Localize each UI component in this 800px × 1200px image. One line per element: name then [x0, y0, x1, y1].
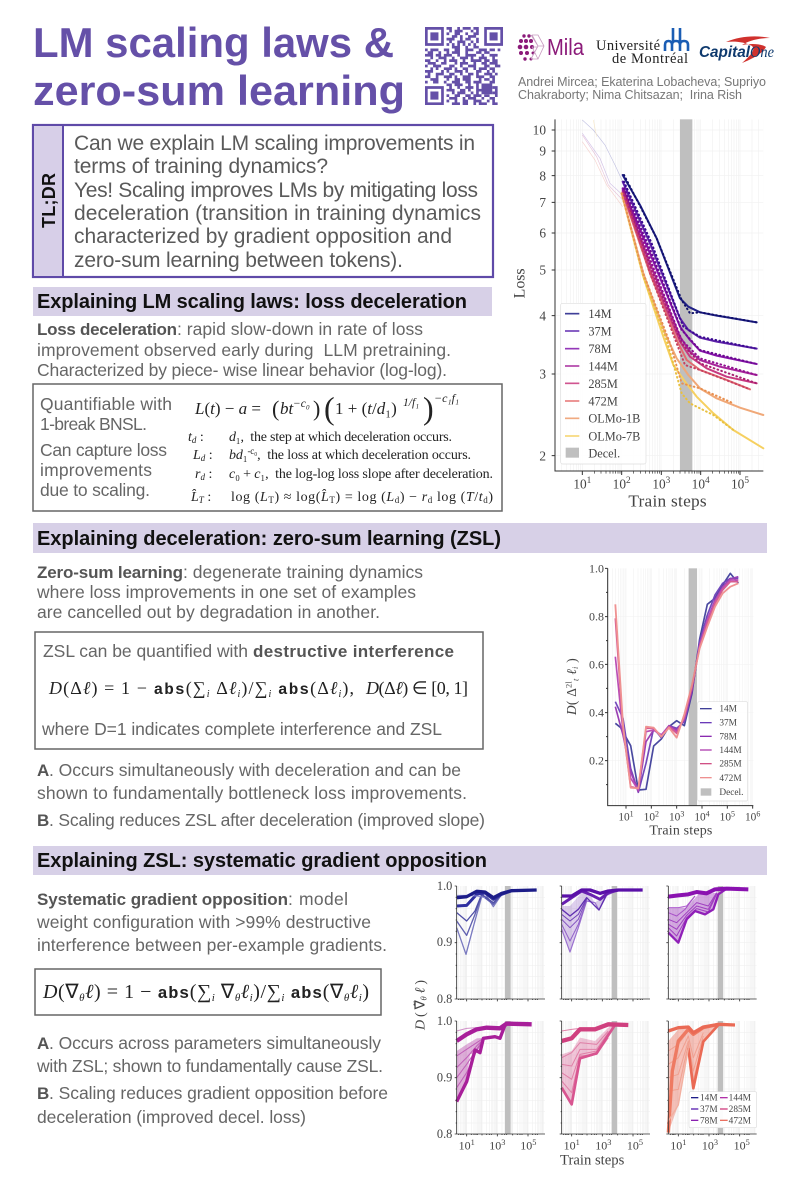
QR code: [425, 28, 502, 104]
axis titles: t: [572, 678, 581, 681]
BNSL definitions: :: [205, 467, 212, 482]
BNSL definitions: d: [192, 435, 197, 445]
BNSL definitions: r: [195, 467, 200, 482]
axes: [605, 568, 753, 809]
legend: Decel.: [588, 447, 620, 461]
ZSL formula: i: [269, 689, 272, 700]
ZSL formula: ),: [342, 678, 354, 699]
formula box: gradient destructive interference: i: [250, 992, 253, 1004]
formula box: gradient destructive interference: θ: [235, 992, 241, 1004]
title: zero-sum learning: [33, 67, 405, 114]
legend: 285M: [588, 377, 618, 391]
BNSL definitions: T: [199, 495, 205, 505]
y axis labels: 6: [539, 226, 546, 241]
BNSL definitions: L: [385, 490, 394, 505]
BNSL side text: Can capture loss: [40, 440, 167, 460]
formula box: gradient destructive interference: )/∑: [253, 981, 281, 1003]
logo: Capital One: Capital: [699, 44, 751, 61]
ZSL formula: ℓ: [229, 678, 237, 698]
x tick labels: 1: [471, 1138, 475, 1147]
BNSL formula: −c₀: [293, 398, 310, 410]
BNSL definitions: , the loss at which deceleration occurs.: [257, 448, 471, 463]
axis titles: ): [564, 658, 579, 666]
BNSL definitions: log (L: [231, 490, 268, 505]
ZSL formula: abs(Δℓ: [278, 678, 337, 699]
y tick labels: 1.0: [437, 879, 452, 893]
BNSL formula: ): [313, 396, 320, 421]
legend: 144M: [729, 1094, 752, 1104]
text: gradient opposition definition: [36, 889, 387, 955]
tick labels: 2: [655, 809, 659, 818]
text: ZSL notes: . Scaling reduces ZSL after deceleration (improved slope): [49, 810, 485, 830]
BNSL side text: Quantifiable with: [40, 394, 172, 414]
heading: gradient opposition: Explaining ZSL: systematic gradient opposition: [37, 850, 487, 872]
formula box: gradient destructive interference: abs(∇: [291, 981, 343, 1004]
BNSL definitions: T: [268, 495, 274, 505]
axis titles: Train steps: [649, 823, 712, 838]
BNSL formula: −c₁f₁: [434, 391, 459, 405]
axis titles: Train steps: [628, 492, 707, 511]
y axis labels: 10: [533, 123, 546, 138]
axis titles: ℓ: [564, 669, 579, 675]
chart: per-parameter destructive interference small multiples: [413, 879, 757, 1168]
panel: TL;DR: [33, 125, 493, 277]
BNSL definitions: d₁, the step at which deceleration occurs.: [229, 430, 452, 445]
legend: 78M: [700, 1116, 718, 1126]
axis titles: i: [571, 666, 580, 669]
axis titles: ℓ: [413, 987, 428, 997]
y tick labels: 1.0: [437, 1014, 452, 1028]
TL;DR text: [74, 132, 481, 272]
BNSL definitions: r: [422, 490, 428, 505]
y axis labels: 5: [539, 263, 546, 278]
BNSL definitions: t: [188, 430, 192, 445]
text: gradient opposition notes: [36, 1033, 388, 1127]
legend: 37M: [588, 324, 612, 338]
tick labels: 0.8: [589, 610, 604, 624]
BNSL formula: ): [423, 390, 434, 426]
formula box: gradient destructive interference: ∇: [215, 981, 235, 1003]
tick labels: 10: [720, 812, 731, 824]
BNSL definitions: ) ≈ log(: [274, 490, 321, 505]
authors: [518, 75, 766, 102]
title: LM scaling laws &: [33, 19, 394, 66]
text: loss deceleration definition: [37, 319, 451, 380]
TL;DR text: Can we explain LM scaling improvements in: [74, 132, 475, 155]
authors: Andrei Mircea; Ekaterina Lobacheva; Supriyo: [518, 75, 766, 89]
panel: 37M: [560, 886, 650, 1001]
legend: 78M: [588, 342, 612, 356]
BNSL formula: (: [272, 396, 279, 421]
legend: OLMo-7B: [588, 429, 640, 443]
tick labels: [589, 561, 760, 824]
text: gradient opposition definition: weight configuration with >99% destructive: [36, 912, 371, 932]
text: ZSL notes: A: [37, 761, 49, 780]
y axis labels: 2: [539, 448, 546, 463]
ZSL formula: D(Δℓ) ∈ [0, 1]: [365, 678, 468, 699]
BNSL definitions: ) = log (: [335, 490, 386, 505]
TL;DR text: Yes! Scaling improves LMs by mitigating loss: [74, 179, 478, 202]
x axis labels: 10: [613, 476, 626, 491]
logo: Université de Montréal: [596, 28, 688, 67]
text: ZSL notes: . Occurs simultaneously with deceleration and can be: [49, 760, 461, 780]
x axis labels: 10: [573, 476, 587, 491]
y tick labels: 0.8: [437, 992, 452, 1006]
BNSL definitions: d: [483, 495, 488, 505]
x tick labels: 10: [734, 1139, 746, 1153]
x tick labels: 3: [714, 1138, 718, 1147]
formula box: gradient destructive interference: ) = 1 − abs(∑: [94, 981, 211, 1004]
BNSL side text: 1-break BNSL.: [40, 414, 147, 434]
axis titles: θ: [418, 995, 428, 1000]
text: loss deceleration definition: Characterized by piece- wise linear behavior (log-log).: [37, 360, 447, 380]
tick labels: 3: [680, 809, 684, 818]
x tick labels: 10: [564, 1139, 576, 1153]
tick labels: 5: [731, 809, 735, 818]
BNSL definitions: [188, 430, 493, 505]
logo: Capital One: One: [750, 44, 774, 61]
axes: [552, 119, 763, 475]
panel: 144M: [455, 1021, 545, 1136]
BNSL formula: bt: [280, 399, 294, 418]
legend: 37M: [719, 719, 738, 729]
BNSL formula: 1 + (t/d₁): [335, 399, 397, 418]
text: ZSL notes: [37, 760, 485, 830]
panel: 285M: [560, 1021, 650, 1136]
y axis labels: [533, 123, 546, 463]
ZSL formula: )/∑: [241, 678, 267, 699]
text: gradient opposition definition: model: [299, 889, 348, 909]
x tick labels: 3: [607, 1138, 611, 1147]
panel: BNSL box: [33, 384, 502, 511]
tick labels: 0.6: [589, 657, 604, 671]
BNSL side text: due to scaling.: [40, 480, 150, 500]
formula box: gradient destructive interference: i: [281, 992, 284, 1004]
BNSL definitions: -c₀: [247, 446, 257, 456]
y tick labels: [437, 879, 452, 1141]
formula box: gradient destructive interference: D(∇: [43, 981, 79, 1003]
y axis labels: 4: [539, 308, 546, 323]
BNSL side text: improvements: [40, 460, 152, 480]
x tick labels: 3: [501, 1138, 505, 1147]
text: gradient opposition notes: . Occurs across parameters simultaneously: [49, 1033, 381, 1053]
x axis labels: 5: [744, 476, 749, 486]
axis titles: ): [413, 980, 428, 985]
text: loss deceleration definition: Loss deceleration: [37, 320, 177, 339]
y axis labels: 3: [539, 367, 546, 382]
axis titles: D ( ∇̃: [413, 1000, 428, 1030]
axis titles: Loss: [512, 268, 529, 298]
chart: destructive interference of loss: [564, 561, 760, 838]
ZSL formula: D(Δℓ) = 1 − abs(∑: [49, 678, 206, 699]
chart: loss vs train steps: [512, 119, 779, 511]
panel: destructive interference box: [35, 632, 483, 749]
box note: where D=1 indicates complete interference and ZSL: [41, 719, 442, 739]
BNSL definitions: :: [196, 430, 204, 445]
x axis labels: 10: [731, 476, 744, 491]
x axis labels: 10: [652, 476, 666, 491]
x tick labels: 10: [670, 1139, 682, 1153]
heading: zero-sum learning: Explaining deceleration: zero-sum learning (ZSL): [37, 528, 501, 550]
BNSL definitions: d: [395, 495, 400, 505]
formula box: gradient destructive interference: ): [362, 981, 369, 1003]
legend: 472M: [588, 394, 618, 408]
formula box: gradient destructive interference: θ: [79, 992, 85, 1004]
x tick labels: 10: [489, 1139, 501, 1153]
x tick labels: 1: [576, 1138, 580, 1147]
panel: 14M: [455, 886, 545, 1001]
axis titles: D( Δ: [564, 688, 579, 715]
legend: 285M: [719, 760, 742, 770]
legend: [698, 702, 748, 801]
panel: 78M: [666, 886, 757, 1001]
x axis labels: 10: [692, 476, 705, 491]
x axis labels: [573, 476, 749, 491]
formula box: gradient destructive interference: ℓ: [85, 981, 94, 1003]
dotted fits: [622, 175, 757, 430]
x axis labels: 4: [705, 476, 710, 486]
tick labels: 1.0: [589, 561, 604, 575]
BNSL definitions: T/t: [466, 490, 483, 505]
x tick labels: 10: [595, 1139, 607, 1153]
legend: [689, 1092, 757, 1128]
x tick labels: 1: [682, 1138, 686, 1147]
legend: 144M: [588, 359, 618, 373]
tick labels: 1: [630, 809, 634, 818]
tick labels: 10: [644, 812, 655, 824]
box heading: ZSL can be quantified with: [43, 641, 248, 661]
BNSL formula: 1/f₁: [403, 397, 419, 409]
tick labels: 0.4: [589, 706, 604, 720]
x tick labels: 5: [532, 1138, 536, 1147]
tick labels: 10: [694, 812, 706, 824]
BNSL definitions: ): [488, 490, 493, 505]
legend: 14M: [700, 1094, 718, 1104]
BNSL definitions: bd₁: [229, 448, 248, 463]
logo: Mila: Mila: [547, 34, 584, 60]
legend: [561, 303, 646, 464]
tick labels: 10: [669, 812, 680, 824]
axis titles: [564, 658, 712, 838]
text: ZSL notes: shown to fundamentally bottleneck loss improvements.: [37, 783, 467, 803]
y tick labels: 0.8: [437, 1127, 452, 1141]
ZSL formula: Δ: [211, 678, 228, 698]
BNSL formula: L(t) − a =: [194, 399, 265, 418]
ZSL formula: [48, 678, 468, 700]
logo: Université de Montréal: de Montréal: [612, 51, 688, 67]
text: gradient opposition definition: interference between per-example gradients.: [37, 935, 387, 955]
text: zero-sum learning definition: Zero-sum learning: [37, 563, 183, 582]
text: gradient opposition definition: Systematic gradient opposition: [37, 890, 288, 909]
axis titles: [512, 268, 707, 511]
text: gradient opposition notes: . Scaling reduces gradient opposition before: [49, 1083, 388, 1103]
formula box: gradient destructive interference: ℓ: [241, 981, 250, 1003]
x axis labels: 2: [626, 476, 631, 486]
axis titles: [413, 980, 625, 1168]
logo: Université de Montréal: Université: [596, 38, 660, 54]
fitted loss curves: [622, 175, 763, 448]
legend: 144M: [719, 746, 742, 756]
x tick labels: 5: [639, 1138, 643, 1147]
x axis labels: 1: [587, 476, 592, 486]
text: gradient opposition notes: deceleration (improved decel. loss): [37, 1107, 306, 1127]
tick labels: 4: [706, 809, 710, 818]
panel: 472M: [666, 1021, 757, 1136]
x tick labels: [459, 1138, 750, 1153]
tick labels: 0.2: [589, 754, 604, 768]
early thin curves: [582, 120, 623, 207]
text: zero-sum learning definition: [36, 562, 423, 622]
axis titles: Train steps: [560, 1152, 625, 1168]
TL;DR text: characterized by gradient opposition and: [74, 225, 452, 248]
legend: 285M: [729, 1105, 752, 1115]
BNSL definitions: log (: [433, 490, 466, 505]
formula box: gradient destructive interference: i: [212, 992, 215, 1004]
formula box: gradient destructive interference: θ: [344, 992, 350, 1004]
text: zero-sum learning definition: where loss improvements in one set of examples: [36, 582, 416, 602]
BNSL definitions: d: [428, 495, 433, 505]
legend: 14M: [588, 307, 612, 321]
y axis labels: 7: [539, 195, 546, 210]
BNSL definitions: d: [200, 472, 205, 482]
logo: Mila: [518, 34, 584, 61]
BNSL definitions: L̂: [320, 489, 329, 505]
heading: loss deceleration: Explaining LM scaling laws: loss deceleration: [37, 291, 467, 313]
BNSL definitions: :: [204, 490, 211, 505]
x tick labels: 5: [746, 1138, 750, 1147]
BNSL definitions: T: [329, 495, 335, 505]
y tick labels: 0.9: [437, 935, 452, 949]
text: loss deceleration definition: improvement observed early during LLM pretraining.: [37, 340, 451, 360]
text: zero-sum learning definition: : degenerate training dynamics: [183, 562, 423, 582]
x tick labels: 10: [459, 1139, 471, 1153]
text: gradient opposition definition: :: [288, 889, 293, 909]
authors: Chakraborty; Nima Chitsazan; Irina Rish: [518, 88, 742, 102]
formula box: gradient destructive interference: i: [359, 992, 362, 1004]
legend: 37M: [700, 1105, 718, 1115]
legend: 14M: [719, 705, 738, 715]
BNSL definitions: L̂: [191, 490, 199, 505]
BNSL formula: (: [324, 390, 335, 426]
formula box: gradient destructive interference: ℓ: [350, 981, 359, 1003]
x axis labels: 3: [666, 476, 671, 486]
BNSL definitions: :: [205, 448, 213, 463]
BNSL definitions: ) −: [400, 490, 421, 505]
y tick labels: 0.9: [437, 1071, 452, 1085]
ZSL formula: i: [238, 689, 241, 700]
TL;DR text: terms of training dynamics?: [74, 155, 328, 178]
y axis labels: 9: [539, 144, 546, 159]
BNSL definitions: d: [201, 453, 206, 463]
logo: Capital One: [699, 36, 774, 63]
title: [33, 19, 405, 114]
legend: 472M: [719, 774, 742, 784]
ZSL formula: i: [207, 689, 210, 700]
ZSL curves: [615, 573, 738, 792]
legend: OLMo-1B: [588, 412, 640, 426]
tick labels: 6: [756, 809, 760, 818]
legend: 78M: [719, 732, 738, 742]
BNSL formula: [194, 390, 459, 426]
formula box: gradient destructive interference: [35, 969, 381, 1015]
x tick labels: 10: [627, 1139, 639, 1153]
legend: Decel.: [719, 788, 743, 798]
box heading: destructive interference: [253, 642, 454, 661]
text: gradient opposition notes: A: [37, 1034, 49, 1053]
TL;DR label: TL;DR: [39, 173, 59, 228]
BNSL side text: [40, 394, 172, 500]
ZSL formula: i: [339, 689, 342, 700]
tick labels: 10: [618, 812, 630, 824]
text: loss deceleration definition: : rapid slow-down in rate of loss: [177, 319, 423, 339]
text: zero-sum learning definition: are cancelled out by degradation in another.: [37, 602, 380, 622]
BNSL definitions: c₀ + c₁, the log-log loss slope after deceleration.: [229, 467, 493, 482]
text: gradient opposition notes: with ZSL; shown to fundamentally cause ZSL.: [36, 1056, 383, 1076]
box heading: [43, 641, 454, 661]
legend: 472M: [729, 1116, 752, 1126]
heading: zero-sum learning: [33, 523, 767, 553]
x tick labels: 10: [702, 1139, 714, 1153]
TL;DR text: zero-sum learning between tokens).: [74, 249, 403, 272]
y axis labels: 8: [539, 168, 546, 183]
text: ZSL notes: B: [37, 811, 49, 830]
text: gradient opposition notes: B: [37, 1084, 49, 1103]
axis titles: 2l: [565, 681, 574, 688]
tick labels: 10: [745, 812, 756, 824]
BNSL definitions: L: [193, 448, 201, 463]
x tick labels: 10: [520, 1139, 532, 1153]
heading: gradient opposition: [33, 846, 767, 875]
TL;DR text: deceleration (transition in training dynamics: [74, 202, 481, 225]
